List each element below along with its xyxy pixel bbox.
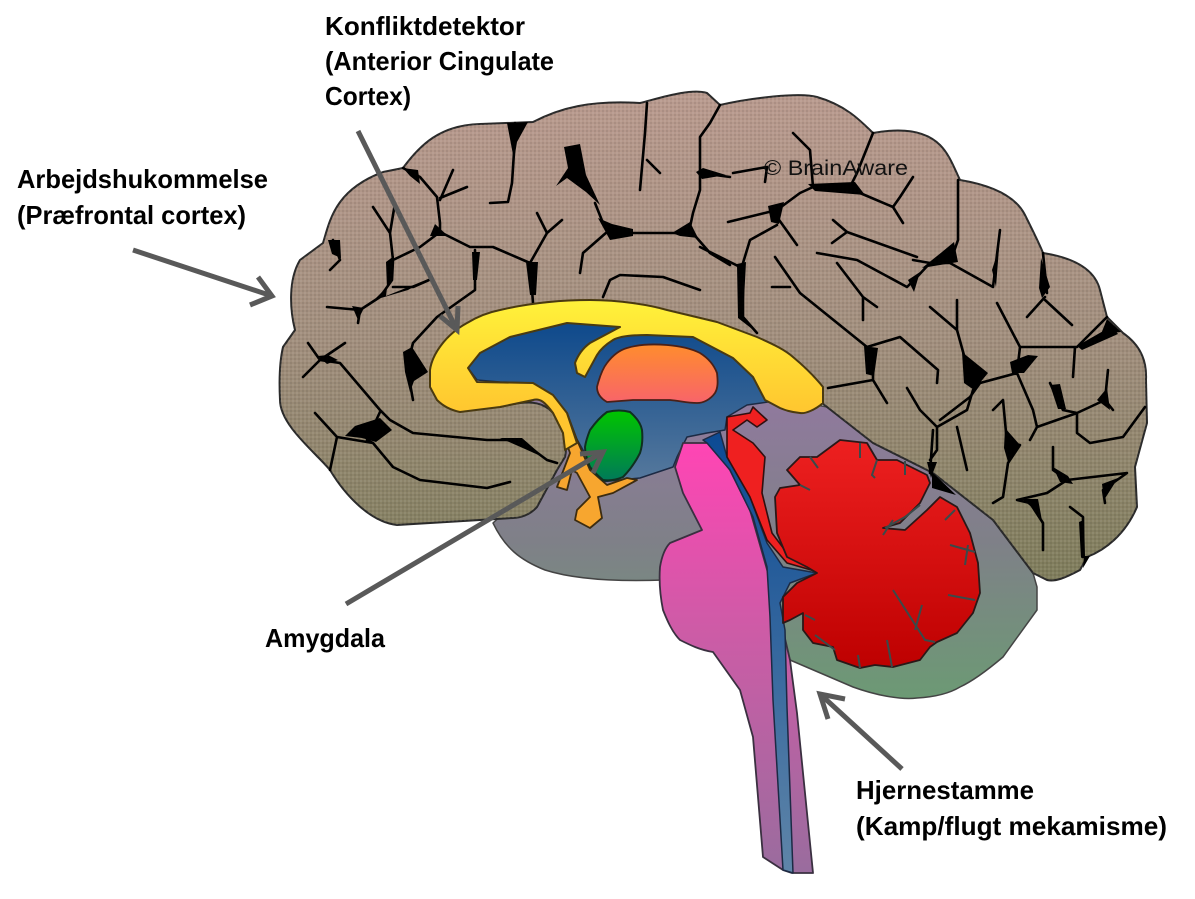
brainstem: pink and purple	[660, 443, 813, 873]
label: Konfliktdetektor: (Anterior Cingulate	[325, 46, 554, 76]
red midbrain strip	[727, 407, 818, 572]
amygdala: green shape	[585, 410, 642, 480]
arrow: to brainstem	[820, 694, 902, 769]
label: Arbejdshukommelse: (Præfrontal cortex)	[17, 200, 246, 230]
label: Amygdala: Amygdala	[265, 623, 386, 653]
label: Konfliktdetektor: Cortex)	[325, 81, 411, 111]
yellow corpus callosum with orange fornix tail	[430, 300, 823, 528]
brainstem: central blue canal	[703, 432, 817, 873]
cerebrum with folded gyri	[280, 92, 1147, 581]
arrow: to anterior cingulate cortex	[358, 131, 458, 330]
sulci: black fold lines	[303, 103, 1145, 568]
blue ventricle	[468, 323, 768, 482]
thalamus: orange shape	[597, 344, 718, 403]
label: Arbejdshukommelse: Arbejdshukommelse	[17, 164, 268, 194]
arrow: to amygdala	[346, 452, 603, 604]
label: Konfliktdetektor: Konfliktdetektor	[325, 11, 525, 41]
copyright text: © BrainAware	[764, 157, 908, 180]
cerebellum: red lobed shape	[775, 440, 980, 668]
lower brain background: brainstem and cerebellum region	[493, 395, 1037, 698]
label: Hjernestamme: (Kamp/flugt mekamisme)	[856, 811, 1167, 841]
arrow: to prefrontal cortex	[133, 250, 272, 305]
label: Hjernestamme: Hjernestamme	[856, 775, 1034, 805]
